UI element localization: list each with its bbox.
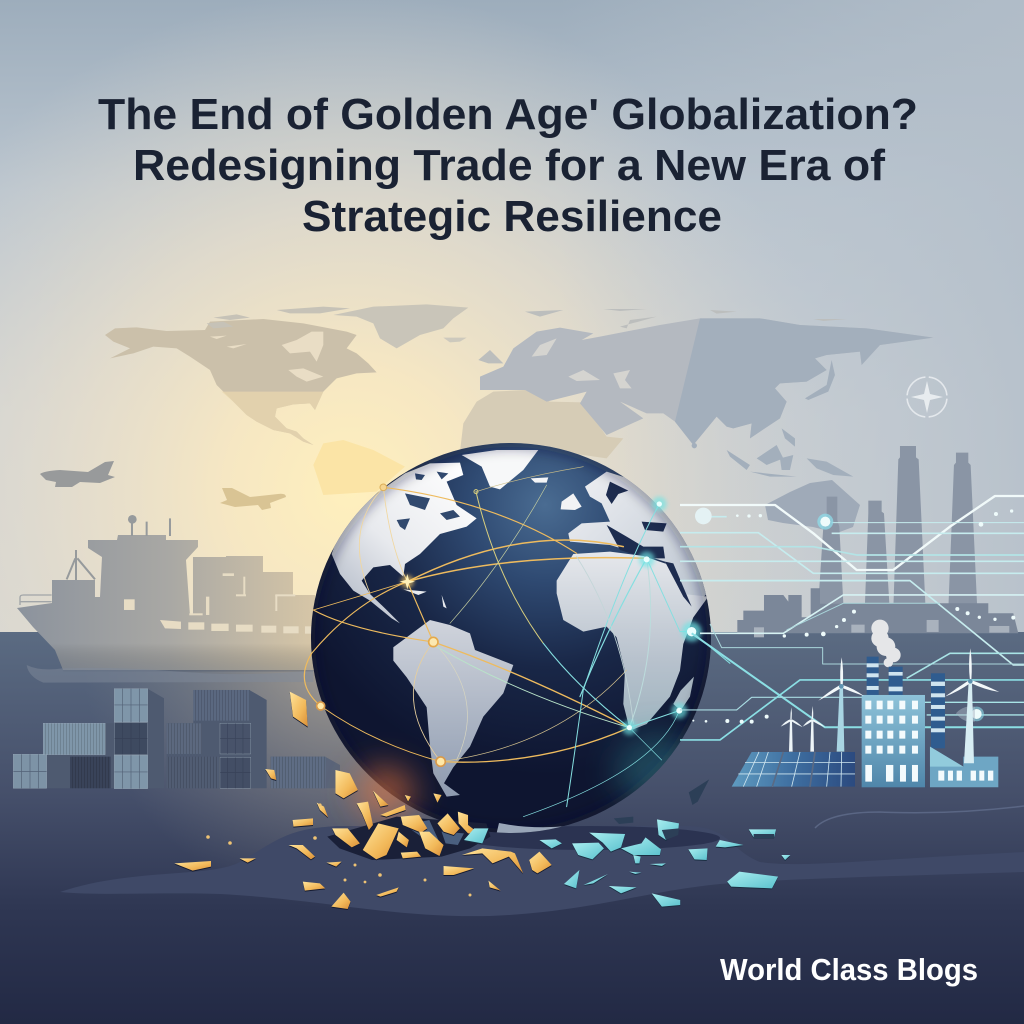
teal edge glow [615,735,705,805]
north america [332,463,477,623]
north america silhouette [105,319,377,445]
australia silhouette [765,480,860,533]
background sky [0,0,1024,640]
baltic sea [606,482,628,504]
europe and near east [568,472,707,607]
inland seas cutout [532,338,632,388]
shipping containers [13,689,340,789]
mediterranean and black sea [607,522,667,558]
africa [557,552,708,731]
main factory building [862,695,925,787]
cargo plane left [40,461,115,487]
solar panels [732,752,855,787]
container ship [17,515,315,683]
hudson bay and lakes [397,472,460,530]
continents [332,450,708,797]
eurasia right tint [675,318,933,445]
gold network nodes [317,484,478,766]
madagascar [673,677,694,711]
factory smoke [871,620,901,667]
arctic and european islands [478,309,847,363]
title line 2: Redesigning Trade for a New Era of [133,141,885,190]
teal routes [437,504,730,817]
ship railing [20,595,52,605]
hudson bay cutout [210,332,323,382]
digital circuit lines [680,496,1024,740]
factory chimneys [867,657,945,748]
trade routes [304,467,730,817]
annex building [930,747,998,787]
circuit nodes [692,508,1015,724]
eurasia and africa map [460,309,933,477]
title line 1: The End of Golden Age' Globalization? [98,90,918,139]
iceland [531,477,548,483]
dark stone fragments [614,779,774,840]
greenland silhouette [333,304,468,348]
cargo plane right [220,488,286,510]
impact glow [355,766,415,818]
gold routes [304,467,647,762]
ship mast and radar [67,515,170,580]
clean energy cluster [732,620,999,787]
globe rim shade [311,443,711,700]
greenland [462,450,538,489]
large wind turbine right [945,648,999,763]
lower north america warm tint [222,392,323,445]
iceland silhouette [443,338,467,342]
title line 3: Strategic Resilience [302,192,722,241]
antarctic crescent [496,823,564,833]
shattered gold fragments [174,692,552,909]
south america [393,620,513,797]
eurasia silhouette [480,318,933,445]
teal network nodes [622,497,702,735]
industrial skyline silhouette [737,446,1018,637]
container side depth [47,689,340,788]
wind turbine left [818,657,864,752]
south america silhouette [313,440,405,495]
world map silhouette [105,304,933,533]
arctic islands [207,307,350,328]
africa silhouette [460,390,623,458]
caribbean islands [403,589,447,608]
united kingdom [561,493,582,510]
stacked containers [13,689,326,789]
annex windows [938,771,993,781]
title [98,90,918,241]
crater rubble under globe [327,817,490,860]
compass icon [907,377,947,417]
americas map [105,304,468,495]
ground and sea [0,632,1024,1024]
gold debris specks [206,803,471,896]
red sea [665,562,692,607]
ship deck windows [124,573,312,634]
ship wake [27,665,313,683]
brand name: World Class Blogs [720,952,978,987]
rubble rocks [405,820,464,847]
factory windows [865,701,918,782]
small wind turbines [781,706,825,752]
container door lines [13,689,251,789]
japan philippines and indonesia [727,360,853,477]
globe [304,443,730,840]
shattered teal fragments [464,819,790,907]
ground swoosh [60,806,1024,916]
